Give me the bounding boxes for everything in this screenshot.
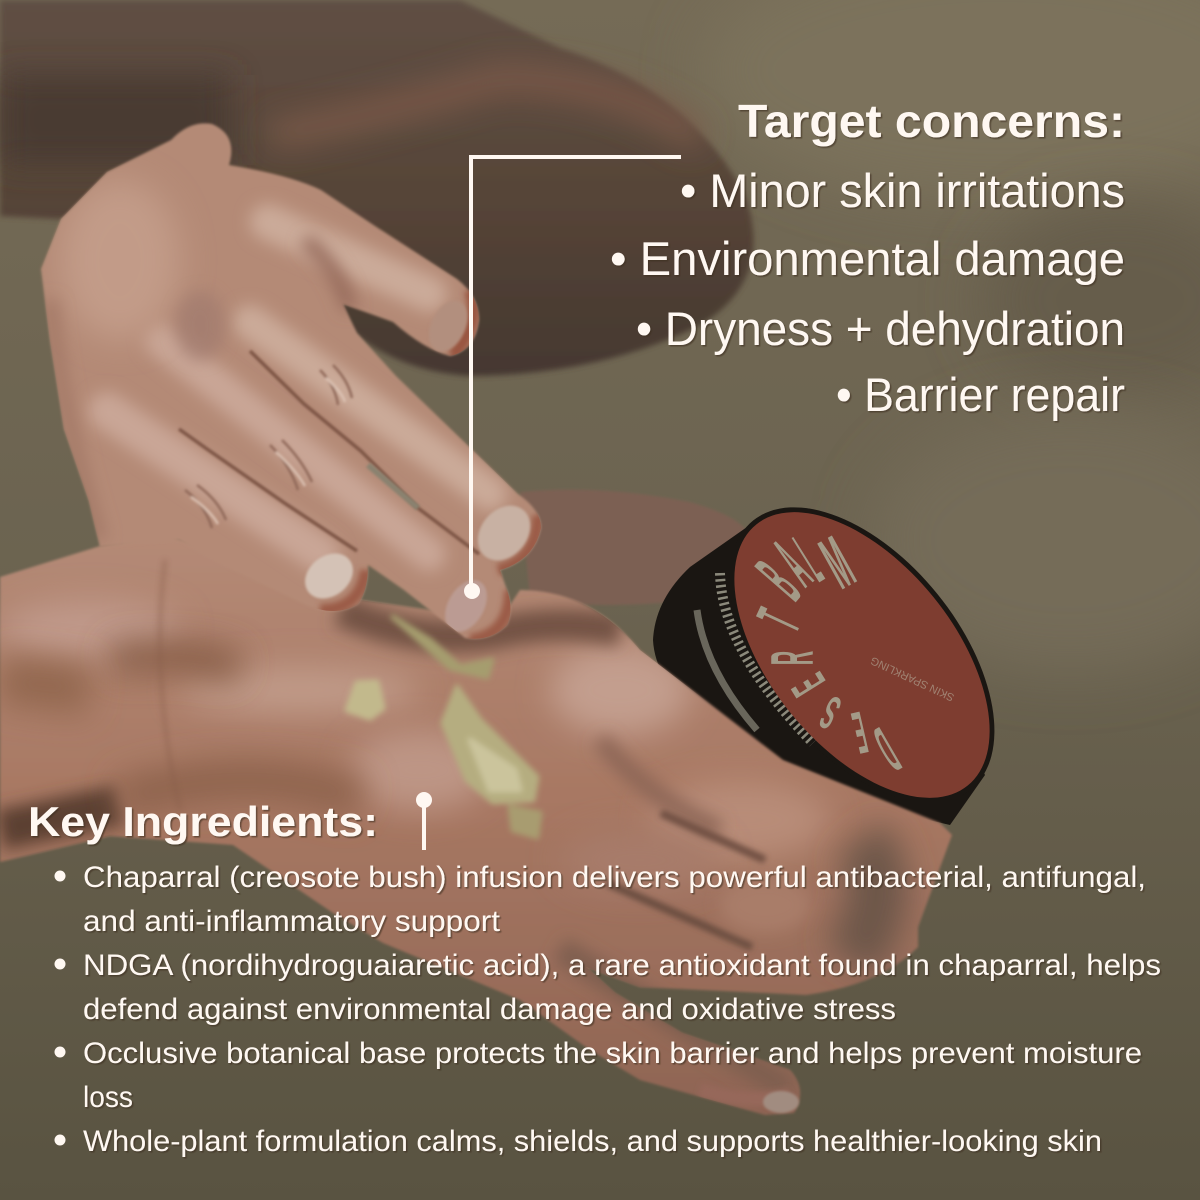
thumb behind jar (520, 490, 746, 605)
heading: key ingredients: Key Ingredients: (28, 798, 378, 845)
list: target concerns: • Barrier repair (836, 368, 1125, 421)
finger highlights (268, 222, 429, 294)
balm jar: SKIN SPARKLING (869, 654, 956, 703)
balm smears (347, 617, 540, 837)
list: key ingredients: Chaparral (creosote bush) infusion delivers powerful antibacterial, antifungal, (83, 861, 1146, 894)
jar label lettering: D (863, 713, 910, 785)
jar label lettering (742, 520, 910, 785)
jar label lettering: S (812, 686, 848, 739)
list: key ingredients: and anti-inflammatory support (83, 905, 501, 938)
jar label lettering: R (761, 651, 826, 665)
finger creases (179, 429, 357, 551)
knuckle wrinkles (185, 365, 352, 528)
jar label lettering: B (742, 547, 817, 615)
jar label lettering: E (783, 664, 836, 704)
list: key ingredients: NDGA (nordihydroguaiaretic acid), a rare antioxidant found in chaparral, helps (83, 949, 1161, 982)
jar label lettering: M (808, 520, 866, 604)
list: key ingredients: Occlusive botanical base protects the skin barrier and helps prevent moisture (83, 1037, 1142, 1070)
list: key ingredients (54, 861, 1161, 1158)
fingertip rims (452, 290, 473, 356)
upper hand (41, 123, 541, 640)
list: key ingredients: Whole-plant formulation calms, shields, and supports healthier-looking skin (83, 1125, 1102, 1158)
list: target concerns: • Minor skin irritations (680, 164, 1125, 217)
jar label lettering: T (744, 600, 814, 641)
list: target concerns: • Environmental damage (610, 232, 1125, 285)
list: key ingredients: defend against environmental damage and oxidative stress (83, 993, 896, 1026)
list: key ingredients: loss (83, 1081, 133, 1114)
jar label lettering: A (760, 526, 827, 602)
fingernails (304, 304, 532, 633)
jar label lettering: E (847, 698, 872, 766)
connector: target concerns to finger (464, 155, 681, 599)
balm jar (653, 460, 1046, 850)
jar label lettering: L (782, 520, 835, 597)
list: target concerns: • Dryness + dehydration (636, 302, 1125, 355)
arm: dark blurred forearm (0, 0, 754, 376)
connector: key ingredients pointer (416, 792, 432, 850)
heading: target concerns: Target concerns: (738, 95, 1125, 147)
lower hand (0, 535, 952, 1115)
list: target concerns (610, 164, 1125, 421)
